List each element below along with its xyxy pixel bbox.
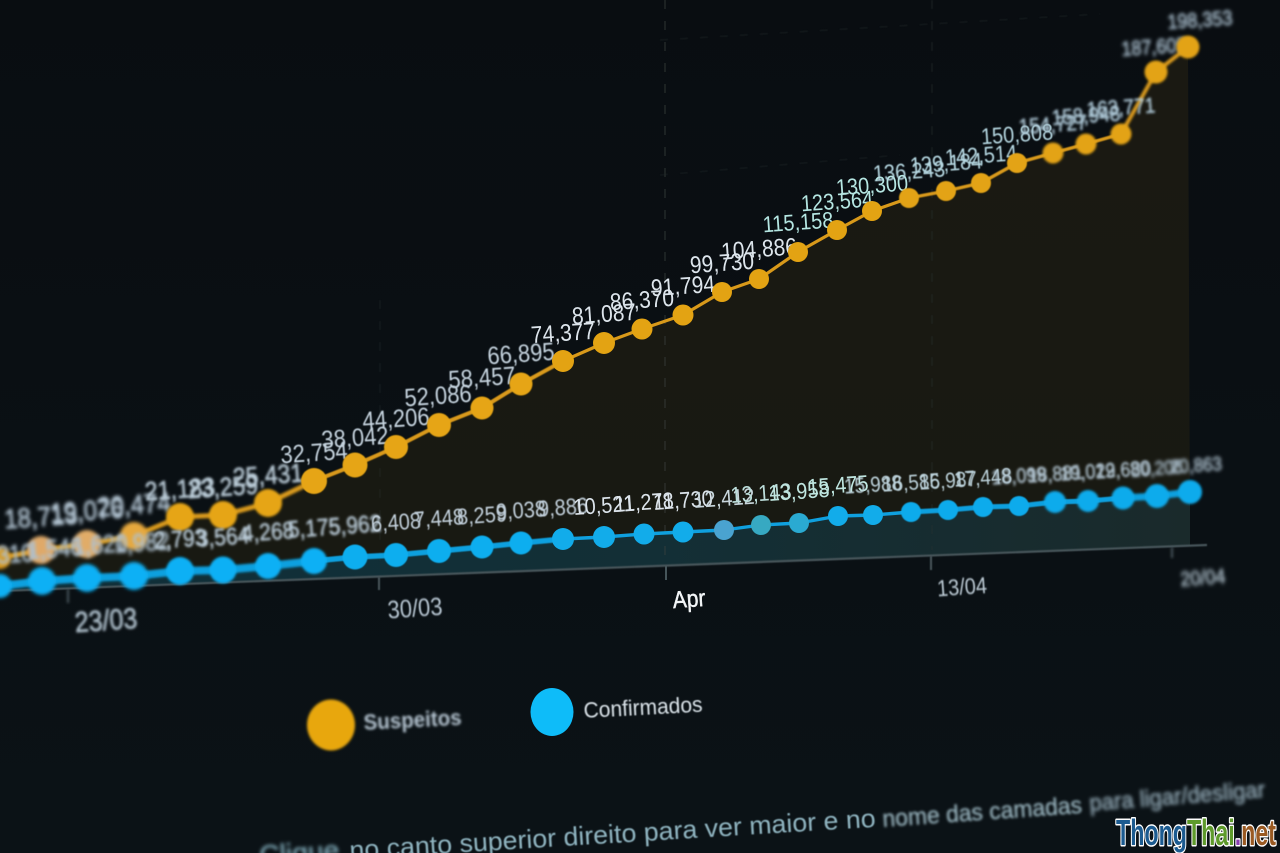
confirmados value labels: 15,988 [843,472,903,499]
suspeitos value labels: 198,353 [1167,7,1233,34]
caption text: para ligar/desligar [1088,776,1266,816]
gridlines [380,0,1100,570]
caption text [258,776,1266,853]
x axis with ticks [0,545,1207,603]
legend: confirmados [530,688,703,736]
suspeitos value labels: 163,771 [1086,94,1156,122]
chart area: suspeitos fill [0,47,1190,591]
legend: confirmados: Confirmados [583,692,703,723]
suspeitos value labels [3,7,1233,535]
confirmados value labels: 1,546 [27,533,83,564]
confirmados value labels: 19,680 [1095,458,1151,484]
confirmados value labels: 9,886 [537,493,589,522]
suspeitos line [0,47,1188,558]
suspeitos value labels: 74,377 [530,318,596,349]
suspeitos value labels: 52,086 [403,379,473,412]
confirmados value labels: 4,268 [241,517,295,547]
suspeitos value labels: 154,727 [1018,111,1088,139]
confirmados value labels: 13,143 [730,479,792,508]
confirmados value labels: 20,206 [1130,456,1184,481]
confirmados value labels: 18,881 [1027,462,1083,488]
suspeitos value labels: 20,474 [96,488,172,523]
caption text: nome das camadas [882,792,1083,833]
suspeitos value labels: 115,158 [762,207,834,238]
suspeitos value labels: 142,514 [944,140,1018,171]
suspeitos value labels: 18,713 [3,500,79,535]
suspeitos value labels: 139,184 [909,148,983,179]
confirmados value labels: 11,278 [613,488,675,517]
suspeitos value labels: 99,730 [689,248,755,279]
x axis date labels: 30/03 [387,593,443,624]
confirmados value labels: 10,521 [573,491,635,520]
suspeitos value labels: 158,948 [1051,102,1121,130]
suspeitos value labels: 58,457 [447,361,517,394]
suspeitos value labels: 136,243 [872,156,946,187]
confirmados value labels: 18,099 [991,464,1047,490]
confirmados value labels: 16,585 [881,470,941,497]
confirmados value labels: 19,022 [1060,460,1116,486]
suspeitos value labels: 104,886 [720,233,798,265]
confirmados value labels: 13,958 [768,477,830,506]
suspeitos value labels: 23,259 [187,471,259,505]
confirmados value labels: 15,475 [807,471,869,500]
suspeitos value labels: 150,808 [980,119,1054,150]
confirmados value labels: 1,620 [72,529,128,560]
suspeitos value labels: 66,895 [486,337,556,370]
x axis date labels [74,566,1226,639]
confirmados value labels: 1,982 [114,527,170,558]
suspeitos value labels: 81,087 [571,299,637,330]
suspeitos value labels: 91,794 [650,271,716,302]
chart area: confirmados fill [0,492,1190,591]
suspeitos value labels: 44,206 [361,402,431,435]
confirmados value labels: 9,038 [495,496,547,525]
confirmados value labels: 8,259 [456,501,508,530]
suspeitos value labels: 123,564 [800,186,874,217]
confirmados value labels: 5,175 [287,513,341,543]
confirmados value labels: 17,448 [953,465,1013,492]
x axis date labels: Apr [672,585,707,613]
confirmados value labels: 11,730 [652,486,714,515]
confirmados data points [0,480,1202,598]
confirmados value labels: 6,408 [370,508,422,537]
suspeitos value labels: 38,042 [320,421,390,454]
suspeitos value labels: 130,300 [835,170,909,201]
confirmados line [0,492,1190,586]
suspeitos value labels: 25,431 [232,459,304,493]
confirmados value labels [0,453,1223,570]
confirmados value labels: 20,863 [1169,453,1223,478]
x axis date labels: 13/04 [936,573,988,602]
suspeitos value labels: 19,076 [49,494,125,529]
suspeitos data points [0,36,1200,569]
confirmados value labels: 2,793 [153,524,207,554]
confirmados value labels: 16,987 [918,468,978,495]
suspeitos value labels: 86,370 [609,285,675,316]
confirmados value labels: 5,962 [328,510,382,540]
x axis date labels: 23/03 [74,603,138,639]
suspeitos value labels: 21,183 [144,473,216,507]
suspeitos value labels: 187,605 [1121,34,1187,61]
legend: suspeitos: Suspeitos [363,705,462,735]
legend: suspeitos [307,700,462,750]
confirmados value labels: 7,448 [413,504,465,533]
confirmados value labels: 12,412 [693,484,755,513]
suspeitos value labels: 32,754 [279,436,349,469]
confirmados value labels: 3,564 [196,522,250,552]
x axis date labels: 20/04 [1180,566,1226,592]
